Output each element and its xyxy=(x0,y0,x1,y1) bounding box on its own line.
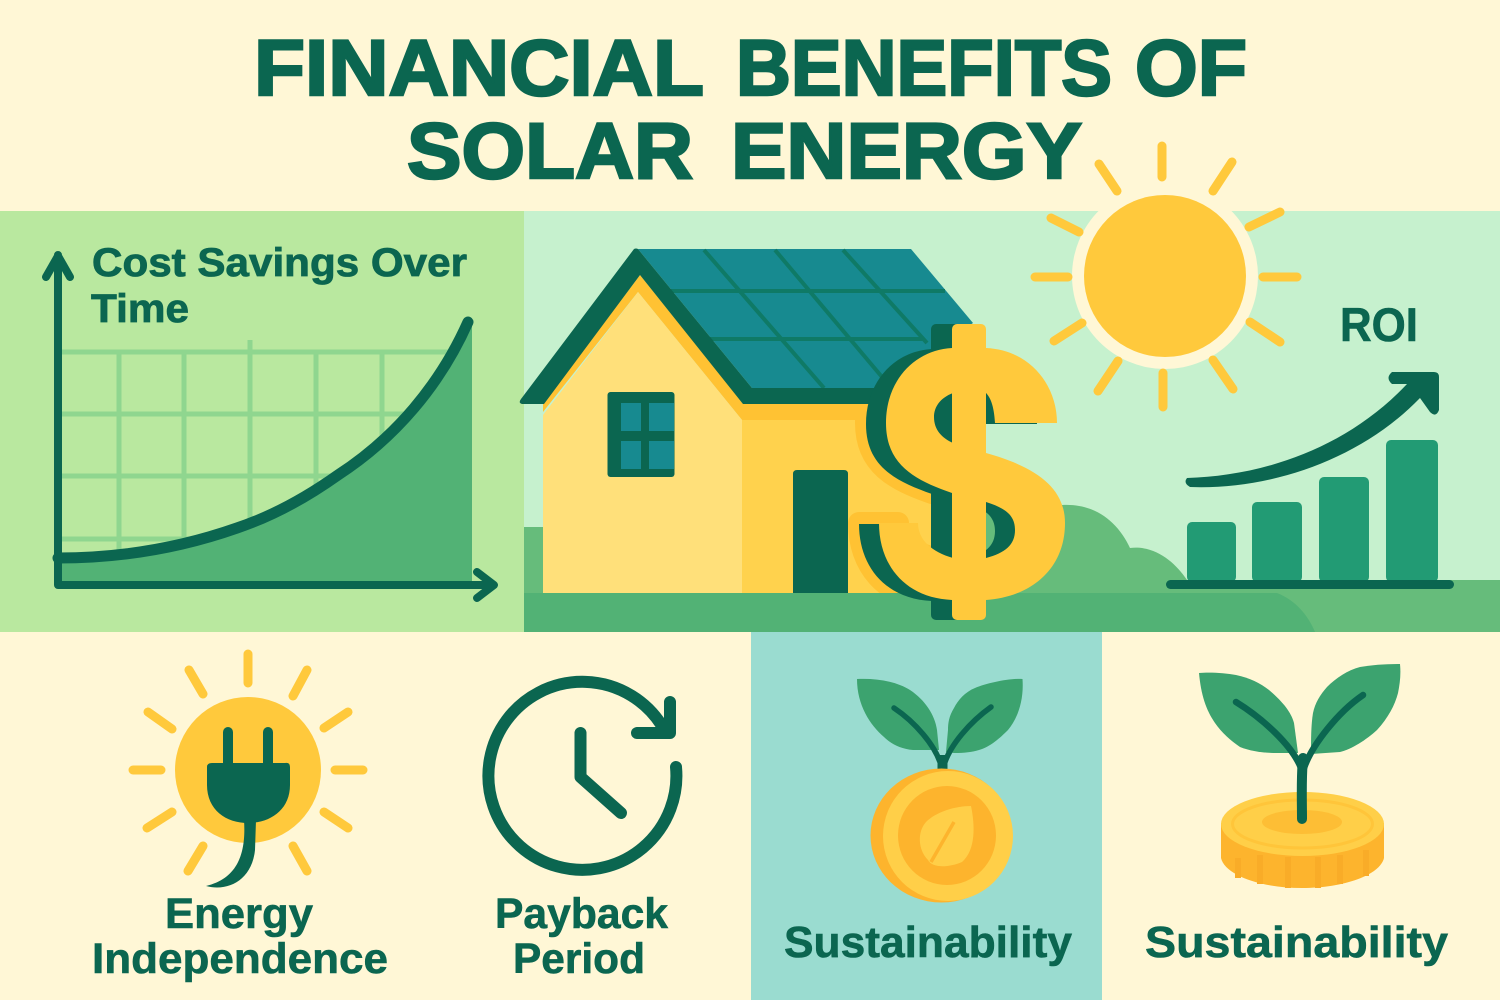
savings area xyxy=(62,322,472,581)
axes with arrows xyxy=(46,255,494,598)
door xyxy=(793,470,848,593)
ROI bar chart xyxy=(1166,440,1454,589)
house wall left xyxy=(543,292,742,593)
panel: teal sustainability background xyxy=(751,632,1102,1000)
icon: sun xyxy=(1035,146,1297,407)
roof edge xyxy=(520,248,880,404)
stem xyxy=(1236,695,1363,819)
label: energy independence xyxy=(92,890,388,983)
window xyxy=(608,392,674,477)
savings curve xyxy=(58,322,468,558)
label: sustainability right: Sustainability xyxy=(1145,918,1449,967)
chart heading: Cost Savings Over xyxy=(92,241,467,285)
label: energy independence: Independence xyxy=(92,935,388,983)
stem xyxy=(894,707,991,772)
coin stack xyxy=(1221,792,1384,888)
chart: cost savings over time xyxy=(46,241,494,598)
chart heading: Time xyxy=(91,287,189,331)
icon: plant on coin stack xyxy=(1199,664,1400,888)
icon: plant on coin xyxy=(857,679,1023,902)
title: BENEFITS xyxy=(736,23,1112,112)
title: SOLAR xyxy=(407,106,693,195)
house with solar roof xyxy=(520,248,973,593)
plug xyxy=(206,727,290,888)
icon: payback clock xyxy=(488,682,676,870)
house wall right xyxy=(742,403,932,593)
label: payback period: Payback xyxy=(495,890,668,938)
solar roof xyxy=(638,249,973,388)
panel: cost savings background xyxy=(0,211,524,632)
label: payback period: Period xyxy=(513,935,645,983)
icon: dollar sign xyxy=(859,324,1065,620)
scene: ground and hills xyxy=(524,505,1500,632)
title xyxy=(254,23,1247,195)
icon: energy independence sun plug xyxy=(133,654,363,888)
chart heading xyxy=(91,241,467,331)
panel: house scene background xyxy=(524,211,1500,632)
leaves xyxy=(1199,664,1400,754)
title: FINANCIAL xyxy=(254,23,704,112)
title: ENERGY xyxy=(731,106,1082,195)
label: payback period xyxy=(495,890,668,983)
arrow: ROI growth xyxy=(1186,372,1439,487)
house wall trim xyxy=(543,275,900,420)
leaves xyxy=(857,679,1023,753)
coin xyxy=(870,768,1013,902)
title: OF xyxy=(1135,23,1247,112)
label: sustainability in teal panel: Sustainability xyxy=(784,918,1073,967)
label: energy independence: Energy xyxy=(165,890,313,938)
ROI label: ROI xyxy=(1340,298,1418,351)
